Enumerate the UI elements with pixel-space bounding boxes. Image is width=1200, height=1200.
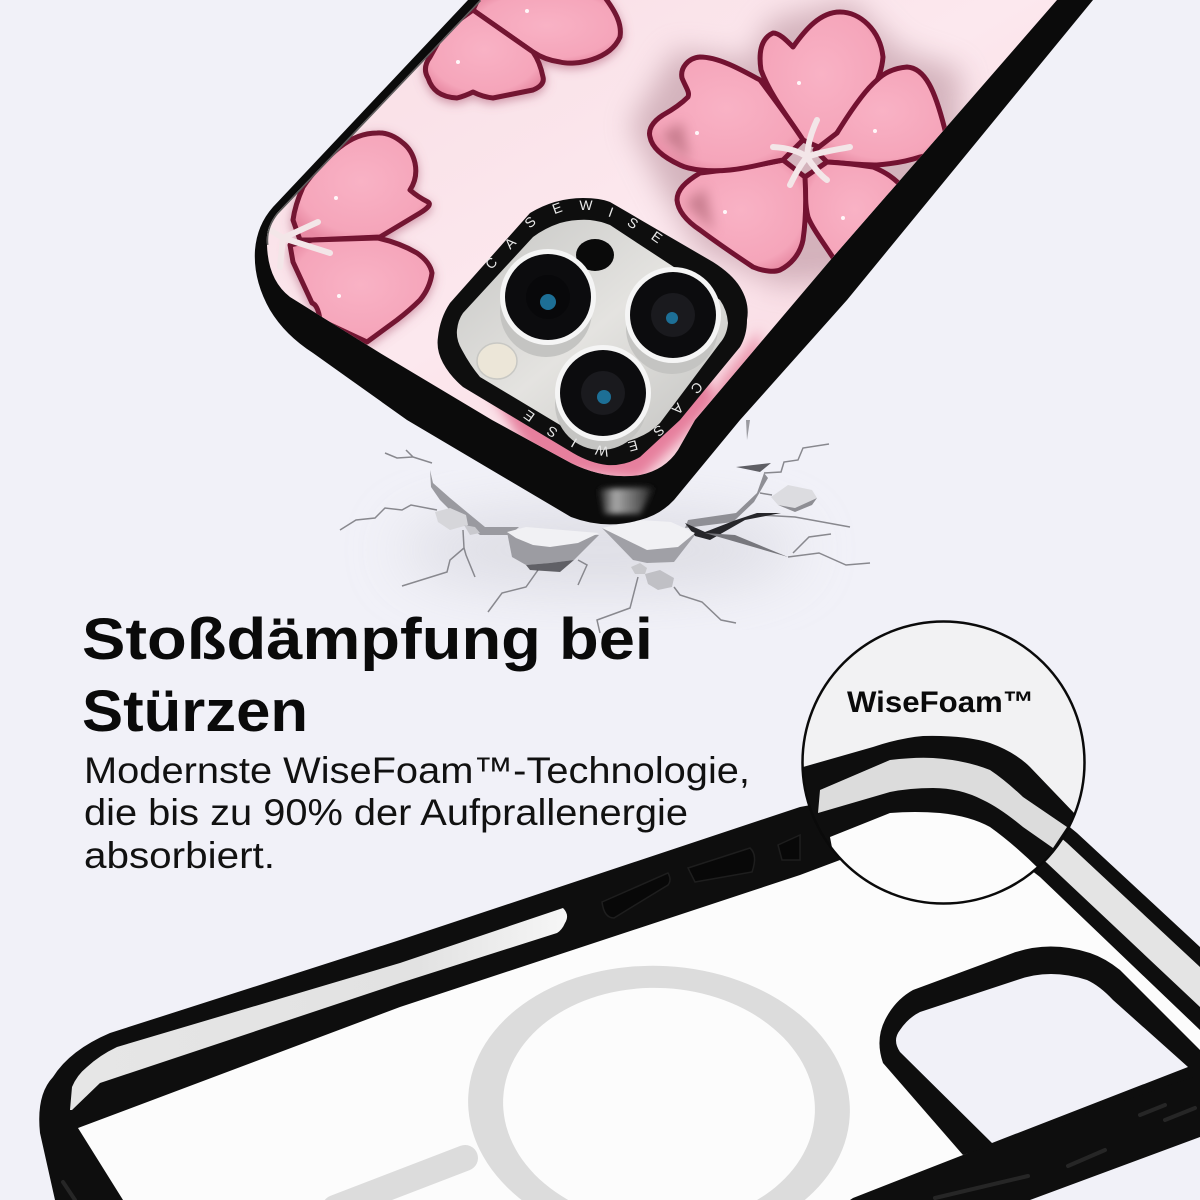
icon: camera island xyxy=(438,197,748,465)
icon: side buttons xyxy=(602,835,800,918)
casewise ring lettering: S xyxy=(521,213,539,231)
callout fill xyxy=(802,622,1084,904)
casewise ring lettering: W xyxy=(593,442,610,460)
body text xyxy=(84,750,750,876)
body text: Modernste WiseFoam™-Technologie, xyxy=(84,750,750,791)
small left fragments xyxy=(435,508,468,530)
icon: lens 1 xyxy=(500,249,596,357)
left rim edge xyxy=(430,470,519,535)
casewise ring lettering: A xyxy=(669,400,687,418)
casewise ring lettering: A xyxy=(501,234,519,252)
centre left fragment xyxy=(507,532,599,565)
lower small fragments xyxy=(631,563,647,574)
casewise ring lettering: S xyxy=(625,214,641,232)
upper phone case with flower design xyxy=(250,0,1100,524)
icon: large flower stamen xyxy=(773,120,850,185)
callout: WiseFoam circle xyxy=(801,620,1086,905)
case outer frame xyxy=(39,770,1200,1200)
translucent strip left xyxy=(70,908,567,1110)
casewise ring lettering: I xyxy=(568,435,580,451)
casewise ring lettering xyxy=(482,197,706,460)
casewise ring lettering: E xyxy=(649,228,665,246)
translucent strip right xyxy=(1020,820,1200,1007)
body text: die bis zu 90% der Aufprallenergie xyxy=(84,792,688,833)
right rock fragment xyxy=(771,485,817,508)
centre right fragment xyxy=(602,528,695,563)
casewise ring lettering: E xyxy=(626,437,640,455)
heading: Stürzen xyxy=(82,679,308,744)
right rim edge xyxy=(685,473,768,528)
lower transparent phone case xyxy=(39,770,1200,1200)
casewise ring lettering: C xyxy=(482,254,500,272)
icon: lens 3 xyxy=(555,345,651,450)
icon: large flower xyxy=(650,12,950,271)
clear back panel xyxy=(78,815,1200,1200)
casewise ring lettering: I xyxy=(606,204,616,220)
icon: large flower petal shading xyxy=(660,122,714,232)
ground cracks xyxy=(340,444,870,633)
callout label: WiseFoam™ xyxy=(847,686,1034,719)
casewise ring lettering: C xyxy=(688,379,706,397)
camera window xyxy=(457,220,728,443)
icon: lidar sensor xyxy=(576,239,614,271)
icon: lens 2 xyxy=(625,267,721,374)
icon: flash xyxy=(477,343,517,379)
casewise ring lettering: W xyxy=(579,197,593,213)
icon: magnetic ring xyxy=(461,956,857,1200)
cracked ground illustration xyxy=(340,420,870,633)
casewise ring lettering: S xyxy=(650,422,668,440)
heading xyxy=(82,607,653,744)
body text: absorbiert. xyxy=(84,835,275,876)
casewise ring lettering: E xyxy=(521,407,537,425)
icon: glossy highlight on case corner xyxy=(598,487,655,514)
icon: left flower stamen xyxy=(270,222,330,267)
highlights xyxy=(334,9,877,298)
phone screen and flower pattern xyxy=(266,0,1057,476)
icon: left flower xyxy=(290,133,432,342)
icon: large flower shadow xyxy=(630,0,960,285)
camera cutout hole xyxy=(896,974,1188,1143)
inner edge of screen xyxy=(267,0,480,245)
casewise ring lettering: S xyxy=(544,423,560,441)
icon: magnet alignment bar xyxy=(335,1158,465,1200)
magnified foam corner xyxy=(804,736,1074,902)
heading: Stoßdämpfung bei xyxy=(82,607,653,672)
icon: top flower xyxy=(425,0,620,98)
icon: lower port details xyxy=(63,1105,1195,1200)
icon: phone case outer shell xyxy=(255,0,1093,524)
camera cutout frame xyxy=(879,946,1200,1155)
casewise ring lettering: E xyxy=(550,199,564,217)
